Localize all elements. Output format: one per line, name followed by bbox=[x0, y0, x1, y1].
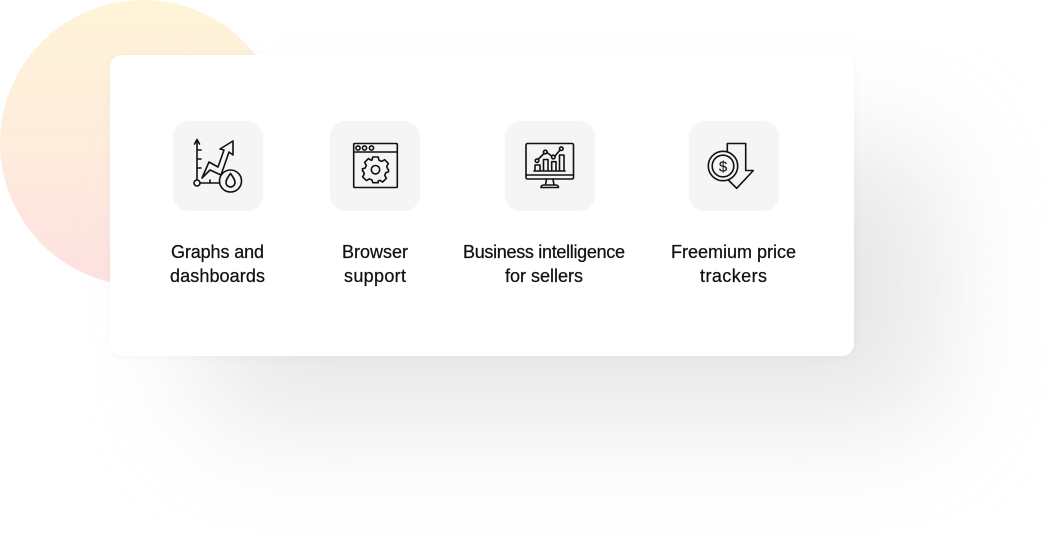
feature: freemium price trackers bbox=[671, 121, 796, 286]
icon tile: monitor bbox=[505, 121, 595, 211]
icon: browser window with gear bbox=[354, 144, 397, 188]
icon: rising chart with drop bbox=[194, 140, 242, 192]
label: business intelligence for sellers: Business intelligence bbox=[463, 242, 625, 262]
label: freemium price trackers: Freemium price bbox=[671, 242, 796, 262]
label: browser support: Browser bbox=[342, 242, 408, 262]
icon tile: price bbox=[689, 121, 779, 211]
label: graphs and dashboards bbox=[170, 242, 265, 286]
label: browser support: support bbox=[344, 266, 406, 286]
label: freemium price trackers: trackers bbox=[700, 266, 767, 286]
label: graphs and dashboards: dashboards bbox=[170, 266, 265, 286]
label: business intelligence for sellers bbox=[463, 242, 625, 286]
label: freemium price trackers bbox=[671, 242, 796, 286]
feature: graphs and dashboards bbox=[170, 121, 265, 286]
icon tile: browser bbox=[330, 121, 420, 211]
icon: dollar coin with down arrow bbox=[708, 144, 753, 188]
label: business intelligence for sellers: for sellers bbox=[505, 266, 583, 286]
soft card shadow bbox=[205, 150, 935, 420]
icon: dollar coin with down arrow: $ bbox=[719, 158, 728, 176]
label: graphs and dashboards: Graphs and bbox=[171, 242, 264, 262]
decorative gradient circle bbox=[0, 0, 286, 286]
feature: business intelligence bbox=[463, 121, 625, 286]
label: browser support bbox=[342, 242, 408, 286]
feature: browser support bbox=[330, 121, 420, 286]
panel: white card bbox=[110, 55, 854, 356]
icon: monitor with bar chart bbox=[526, 144, 574, 188]
icon tile: graphs bbox=[173, 121, 263, 211]
